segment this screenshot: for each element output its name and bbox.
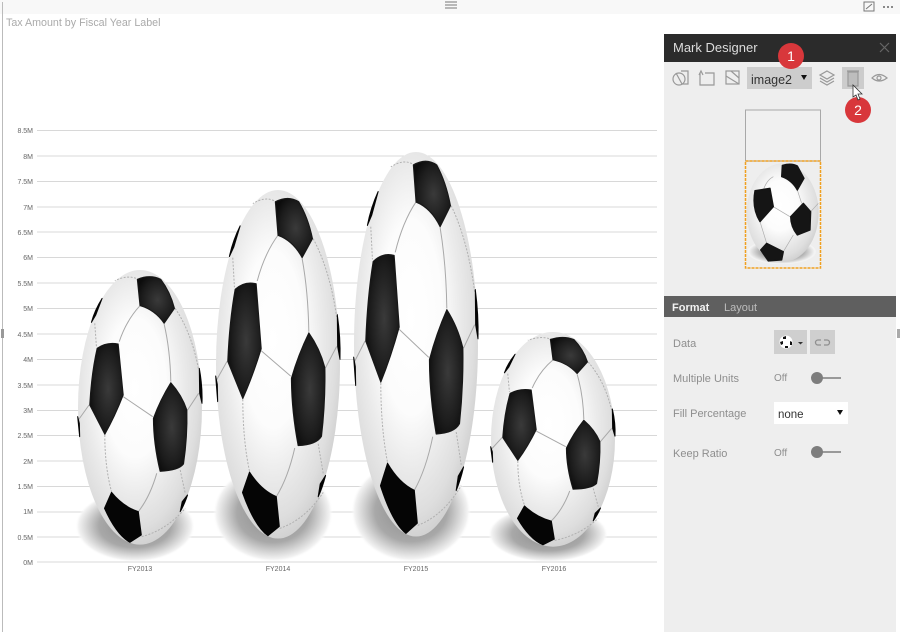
- ball bar: FY2013: [75, 270, 202, 562]
- x axis labels: FY2015: [404, 566, 428, 573]
- chart: tax amount by fiscal year: [17, 128, 657, 573]
- y axis gridlines and labels: 3M: [23, 408, 33, 415]
- icon: image: [726, 71, 739, 84]
- x axis labels: FY2016: [542, 566, 566, 573]
- x axis labels: FY2014: [266, 566, 290, 573]
- callout badge 2: [845, 97, 871, 123]
- panel header: Mark Designer: [673, 40, 758, 55]
- icon: delete button: [842, 67, 864, 89]
- row: Fill Percentage: Fill Percentage: [673, 408, 746, 420]
- row: Fill Percentage: [673, 402, 848, 424]
- row: Multiple Units: Off: [774, 373, 787, 384]
- y axis gridlines and labels: 6M: [23, 255, 33, 262]
- Format / Layout tab bar: Format: [672, 302, 710, 314]
- y axis gridlines and labels: 0.5M: [17, 535, 33, 542]
- y axis gridlines and labels: 7M: [23, 205, 33, 212]
- icon: layers: [820, 71, 834, 85]
- icon: eye: [872, 74, 887, 81]
- icon: text box: [699, 71, 714, 85]
- chart title: Tax Amount by Fiscal Year Label: [6, 17, 160, 29]
- y axis gridlines and labels: 1M: [23, 509, 33, 516]
- row: Fill Percentage: none: [778, 409, 804, 421]
- image dropdown: image2: [751, 73, 792, 87]
- panel: Mark Designer: [664, 34, 896, 632]
- preview ball image: [747, 163, 819, 264]
- image dropdown: [747, 67, 812, 89]
- Format / Layout tab bar: [664, 296, 896, 317]
- row: Keep Ratio: Keep Ratio: [673, 448, 727, 460]
- panel header: [664, 34, 896, 62]
- row: Keep Ratio: [673, 446, 841, 460]
- callout badge 2: 2: [854, 102, 862, 118]
- y axis gridlines and labels: 4M: [23, 357, 33, 364]
- y axis gridlines and labels: 1.5M: [17, 484, 33, 491]
- y axis gridlines and labels: 8M: [23, 154, 33, 161]
- icon: shapes: [673, 71, 688, 85]
- y axis gridlines and labels: 4.5M: [17, 332, 33, 339]
- row: Data: Data: [673, 338, 697, 350]
- mark preview: [746, 110, 820, 268]
- y axis gridlines and labels: 7.5M: [17, 179, 33, 186]
- ball bar: FY2016: [488, 332, 615, 562]
- icon: mouse cursor: [853, 85, 862, 100]
- y axis gridlines and labels: 5.5M: [17, 281, 33, 288]
- y axis gridlines and labels: 5M: [23, 306, 33, 313]
- top toolbar strip: [0, 0, 900, 14]
- y axis gridlines and labels: 8.5M: [17, 128, 33, 135]
- ball bar: FY2014: [213, 190, 340, 562]
- y axis gridlines and labels: [17, 128, 657, 567]
- Format / Layout tab bar: Layout: [724, 302, 757, 314]
- x axis labels: [128, 566, 566, 573]
- y axis gridlines and labels: 3.5M: [17, 383, 33, 390]
- callout badge 1: 1: [787, 48, 795, 64]
- row: Data: [673, 330, 835, 354]
- x axis labels: FY2013: [128, 566, 152, 573]
- y axis gridlines and labels: 2.5M: [17, 433, 33, 440]
- row: Multiple Units: [673, 372, 841, 385]
- y axis gridlines and labels: 6.5M: [17, 230, 33, 237]
- y axis gridlines and labels: 0M: [23, 560, 33, 567]
- ball bar: FY2015: [351, 152, 478, 562]
- row: Multiple Units: Multiple Units: [673, 373, 740, 385]
- callout badge 1: [778, 43, 804, 69]
- row: Keep Ratio: Off: [774, 448, 787, 459]
- y axis gridlines and labels: 2M: [23, 459, 33, 466]
